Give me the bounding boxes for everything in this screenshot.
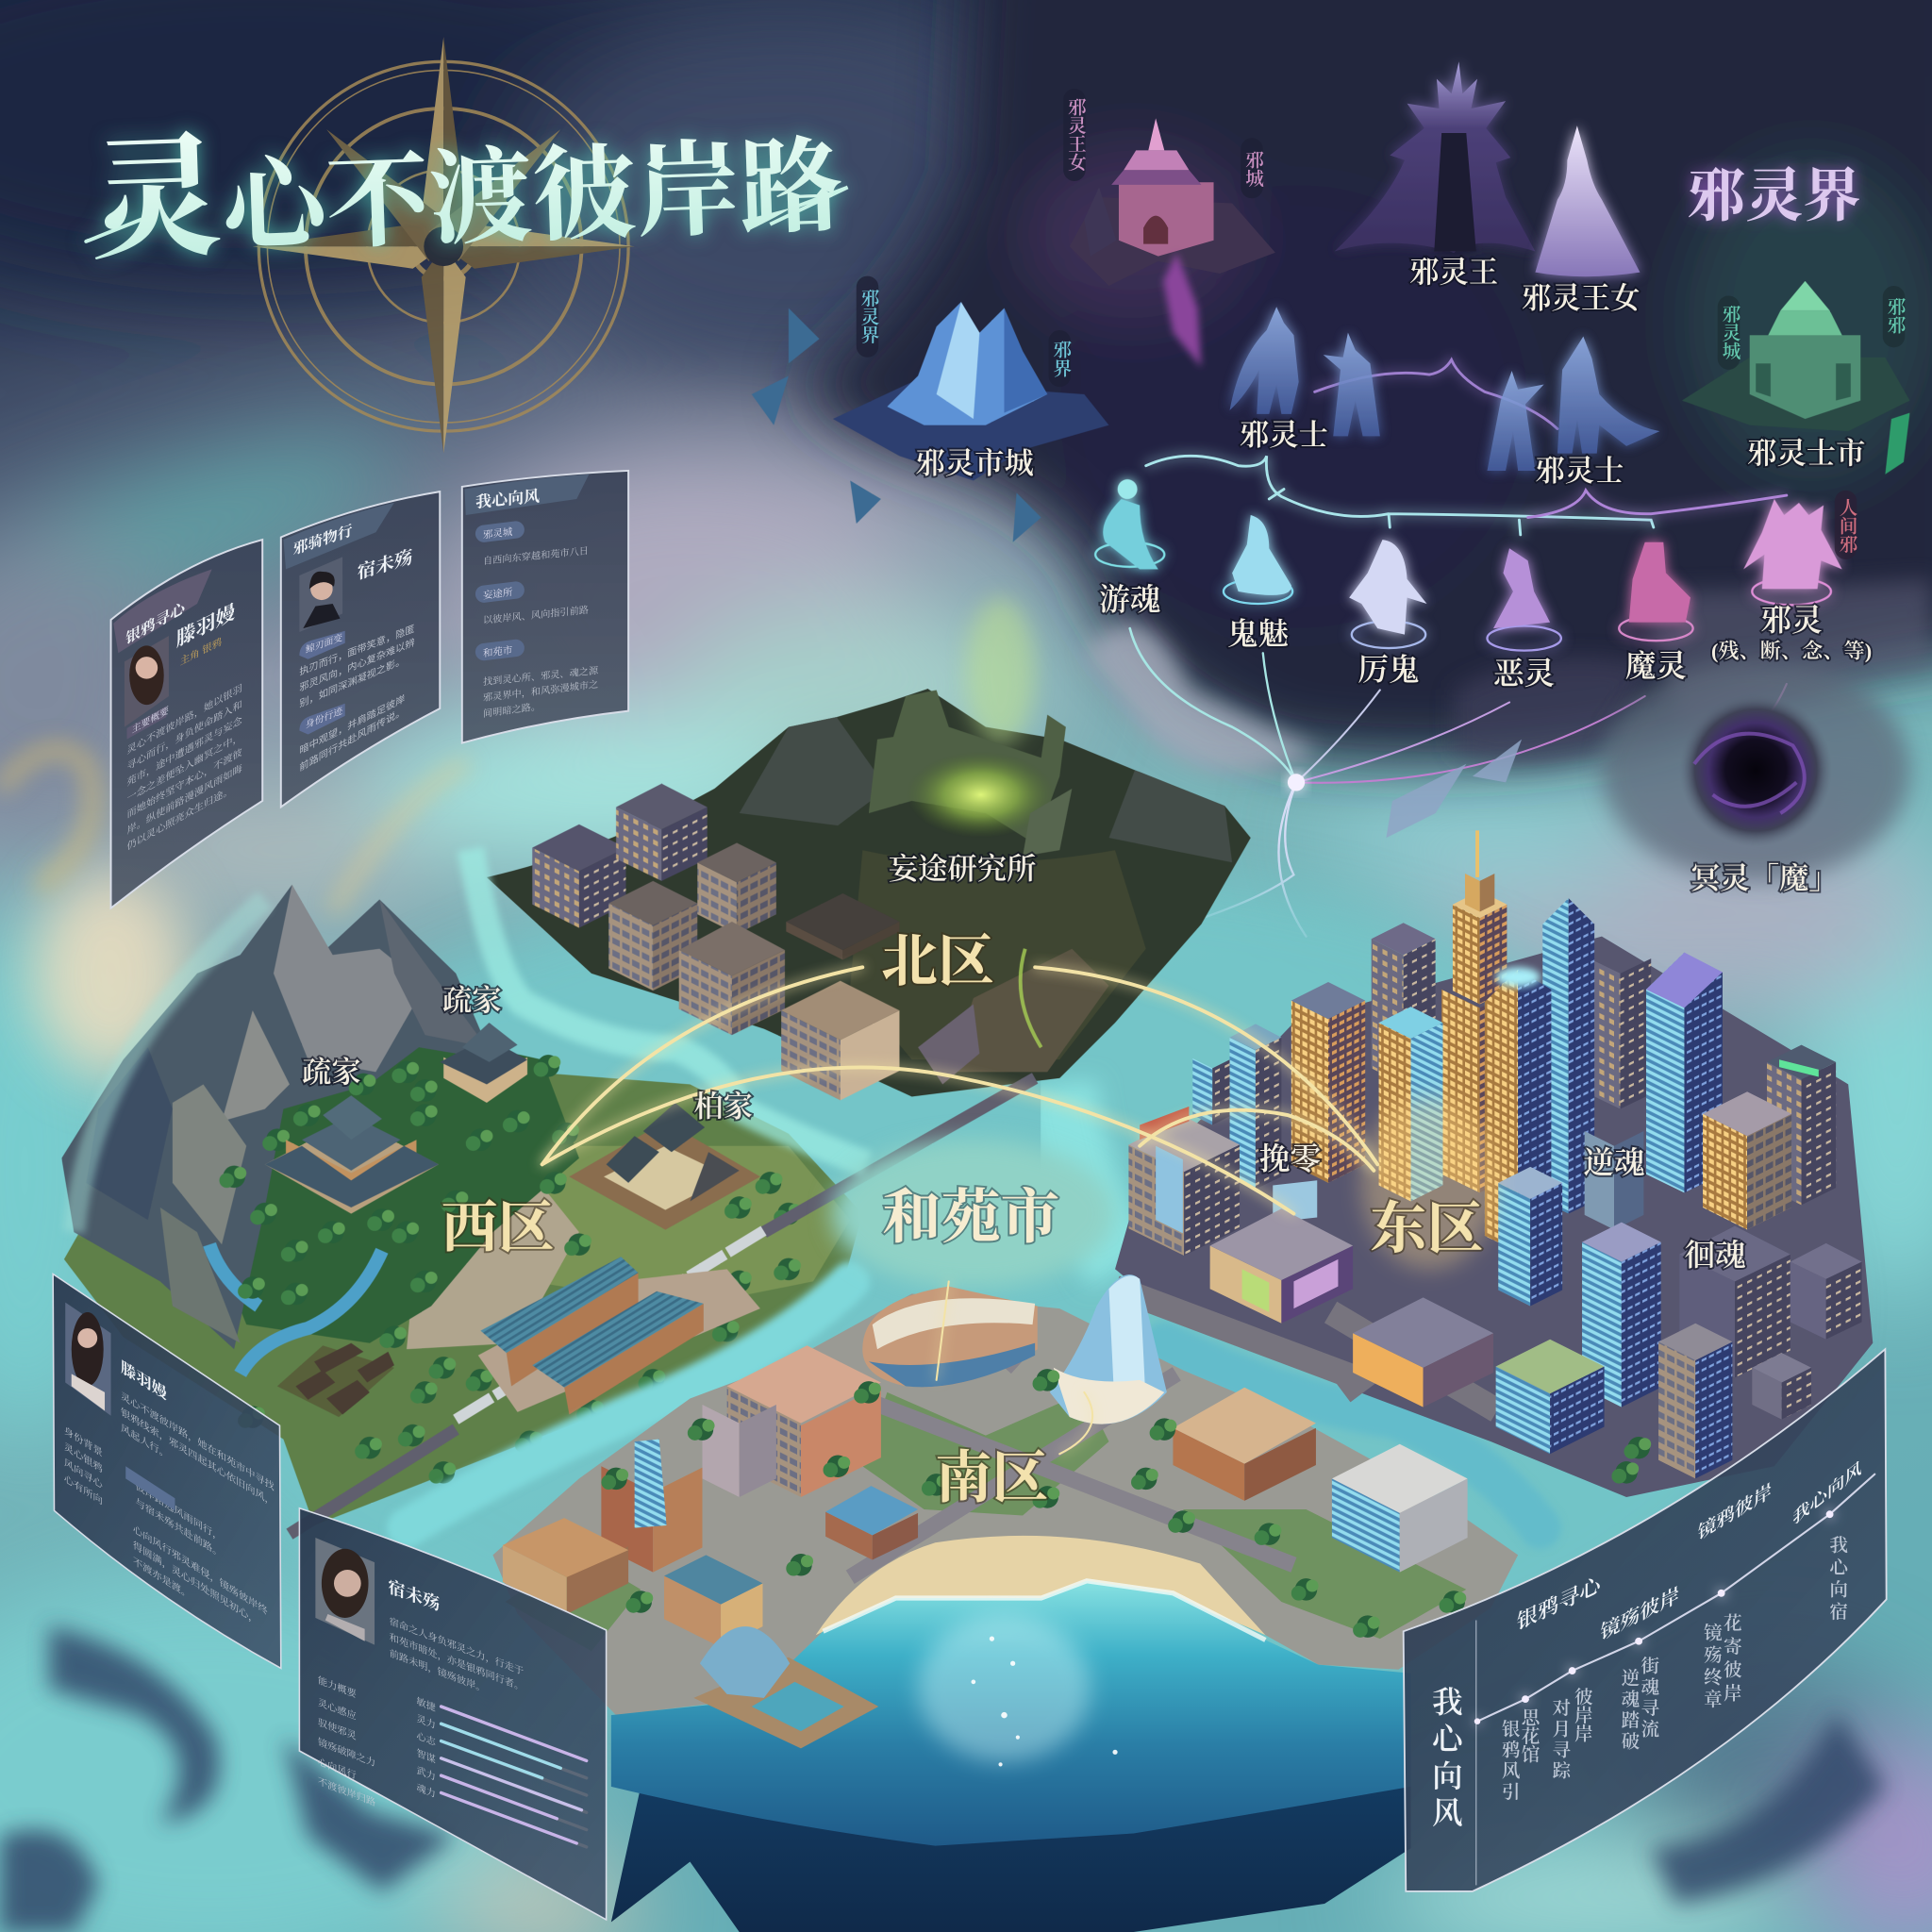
map: central plain behind city name: [832, 1140, 1115, 1288]
panel: dark spirit realm backdrop: [801, 0, 1932, 773]
vertical place tags: [857, 89, 1906, 559]
vertical event text: 镜殇终章: [1700, 1623, 1722, 1711]
district labels: [441, 930, 1484, 1509]
district labels: 北区: [881, 930, 994, 993]
body text: 找到灵心所、邪灵、魂之源: [483, 664, 599, 688]
panel: character card two: 执刃而行，面带笑意，隐匿: [299, 623, 415, 678]
body text: 身份背景: [64, 1424, 103, 1459]
icon: pink spirit castle: [1070, 118, 1275, 367]
body text: 智谋: [416, 1747, 436, 1766]
district labels: 西区: [441, 1196, 555, 1259]
vertical event text: 对月寻踪: [1549, 1698, 1571, 1782]
icon: brick hall: [1173, 1428, 1244, 1501]
east district skyline: [1128, 830, 1862, 1484]
place labels: 逆魂: [1583, 1145, 1645, 1180]
realm labels: 邪灵士市: [1747, 437, 1865, 470]
body text: 风向寻心: [64, 1456, 103, 1491]
body text: 灵力: [416, 1712, 436, 1731]
portrait: [299, 557, 342, 632]
card heading: [113, 569, 212, 653]
realm labels: (残、断、念、等): [1711, 639, 1872, 662]
icon: ruins: [869, 690, 1066, 844]
card heading: 银鸦寻心: [125, 597, 187, 648]
icon: observatory dome and pier: [693, 1657, 878, 1748]
vertical event text: 彼岸岸: [1571, 1687, 1592, 1742]
body text: 寻心而行，身负使命踏入和: [127, 697, 242, 773]
panel: character card lower left: [53, 1274, 281, 1668]
realm labels: 邪灵王女: [1522, 282, 1640, 315]
body text: 灵心不渡彼岸路，她在和苑市中寻找: [121, 1389, 275, 1493]
vertical event text: 逆魂踏破: [1618, 1668, 1640, 1752]
panel: character card two: 暗中观望，并肩踏足彼岸: [299, 691, 406, 757]
body text: 心向风行邪灵难侵，镜殇彼岸终: [133, 1522, 268, 1618]
stat bars: [441, 1707, 587, 1847]
body text: 灵心感应: [318, 1696, 357, 1723]
card heading: [283, 503, 394, 569]
pill label: 身份行迹: [306, 704, 343, 731]
name: 宿未殇: [358, 545, 413, 584]
place labels: 疏家: [302, 1056, 361, 1089]
timeline section titles: 我心向风: [1792, 1457, 1862, 1529]
place labels: [302, 852, 1839, 1273]
body text: 间明暗之路。: [483, 700, 541, 720]
panel: character card one: 主角 银鸦: [180, 635, 222, 668]
place labels: 疏家: [442, 984, 502, 1017]
forest underlay: [209, 1035, 579, 1343]
body text: 邪灵界中，和风弥漫城市之: [483, 678, 598, 704]
body text: 彼岸路远风雨同行，: [136, 1479, 222, 1544]
vertical place tags: 人间邪: [1836, 498, 1857, 553]
body text: 以彼岸风、风向指引前路: [483, 604, 589, 626]
panel: character card three: 邪灵城: [483, 525, 513, 541]
body text: 镜殇破障之力: [318, 1736, 375, 1770]
ghost: evil spirit: [1487, 548, 1561, 651]
vertical event text: 思花馆: [1518, 1707, 1540, 1763]
body text: 前路未明，镜殇彼岸。: [390, 1647, 485, 1695]
card heading: 我心向风: [475, 487, 540, 511]
panel: character card two: 邪灵风向，内心复杂难以辨: [299, 636, 415, 694]
body text: 驭使邪灵: [318, 1716, 357, 1742]
body text: 武力: [416, 1764, 436, 1783]
body text: 得圆满，灵心归处照见初心，: [133, 1538, 258, 1627]
pill labels: [475, 520, 525, 661]
panel: character card one: [111, 540, 262, 908]
body text: 宿命之人身负邪灵之力，行走于: [390, 1615, 525, 1678]
name: 宿未殇: [388, 1575, 440, 1615]
body text: 和苑市暗处，亦是银鸦同行者。: [390, 1631, 524, 1693]
icon: glass spiral tower: [1050, 1274, 1167, 1424]
realm labels: 邪灵士: [1535, 454, 1624, 487]
ghost: demon spirit: [1619, 542, 1693, 641]
body text: 仍以灵心照亮众生归途。: [127, 782, 233, 853]
body text: 敏捷: [416, 1695, 436, 1714]
map: west district land: [61, 885, 1035, 1534]
map: surrounding water and mist: [148, 862, 1824, 1750]
ghost: malevolent spirit: [1743, 499, 1842, 605]
district labels: 东区: [1370, 1197, 1484, 1260]
timeline section titles: 镜殇彼岸: [1601, 1583, 1679, 1644]
body text: 与宿未殇共赴前路。: [136, 1495, 222, 1560]
body text: 一念之差便坠入幽冥之中，: [127, 729, 242, 805]
realm labels: 恶灵: [1493, 657, 1555, 691]
icon: west shops: [503, 1545, 567, 1614]
body text: 灵心不渡彼岸路，她以银羽: [127, 681, 242, 757]
body text: 魂力: [416, 1781, 436, 1800]
body text: 苑市，途中遭遇邪灵与妄念: [127, 713, 242, 789]
card heading: 邪骑物行: [293, 521, 353, 558]
panel: character card two: 别，如同深渊凝视之影。: [299, 654, 405, 710]
body text: 心志: [416, 1729, 436, 1749]
map: mist between districts: [74, 849, 868, 1232]
icon: pink civic block: [727, 1386, 801, 1497]
figures: six ghost types: [1095, 479, 1842, 651]
body text: 而她始终坚守本心，不渡彼: [127, 745, 242, 821]
icon: green spirit castle: [1682, 281, 1909, 475]
card heading: [464, 475, 589, 515]
body text: 不渡亦是渡。: [133, 1554, 191, 1602]
icon: black hole vortex: [1386, 659, 1909, 881]
realm title: 邪灵界: [1688, 165, 1861, 229]
vertical place tags: 邪灵城: [1719, 305, 1740, 360]
icon: station: [478, 1257, 760, 1414]
icon: compass rose: [253, 37, 635, 454]
realm labels: [915, 256, 1872, 691]
map: north district hill: [487, 597, 1251, 1096]
pill label: [125, 1466, 175, 1510]
vertical place tags: 邪邪: [1884, 297, 1906, 334]
vertical title: 我心向风: [1427, 1686, 1462, 1834]
timeline section titles: 银鸦寻心: [1517, 1571, 1603, 1636]
body text: 风起人行。: [121, 1421, 169, 1462]
realm labels: 邪灵王: [1409, 256, 1498, 289]
place labels: 柏家: [693, 1090, 753, 1123]
panel: character card three: 和苑市: [483, 643, 513, 659]
vertical event text: [1498, 1535, 1847, 1803]
name: 滕羽嫚: [176, 600, 235, 651]
vertical event text: 花寄彼岸: [1720, 1613, 1741, 1707]
realm labels: 魔灵: [1625, 649, 1687, 684]
map: south district land: [492, 1274, 1518, 1715]
icon: blue crystal floating city: [752, 302, 1109, 542]
body text: 能力概要: [318, 1674, 357, 1701]
place labels: 挽零: [1259, 1142, 1321, 1177]
icon: small compound: [277, 1343, 394, 1417]
icon: white hospital block: [1332, 1478, 1400, 1573]
vertical place tags: 邪灵界: [858, 289, 879, 343]
district labels: 和苑市: [882, 1184, 1059, 1250]
body text: 银鸦线索，邪灵四起其心依旧向风，: [121, 1405, 275, 1509]
river: [209, 1244, 382, 1374]
vertical place tags: 邪灵王女: [1064, 97, 1086, 172]
name: 滕羽嫚: [121, 1357, 167, 1404]
icon: curved mall: [862, 1287, 1038, 1387]
pill label: 鲸刃面变: [306, 631, 342, 656]
hierarchy connector lines: [1096, 359, 1787, 949]
body text: 不渡彼岸归路: [318, 1775, 375, 1809]
portrait: [315, 1538, 375, 1645]
icon: courtyard compound: [569, 1103, 760, 1230]
timeline line: [1474, 1474, 1875, 1724]
body text: 心有所向: [64, 1472, 103, 1507]
realm labels: 邪灵市城: [915, 447, 1034, 480]
realm labels: 厉鬼: [1357, 653, 1420, 688]
body text: 心向风行: [318, 1756, 357, 1782]
realm labels: 游魂: [1099, 583, 1160, 618]
realm labels: 邪灵士: [1240, 419, 1328, 452]
portrait: [65, 1303, 111, 1416]
vertical event text: 我心向宿: [1826, 1535, 1847, 1624]
realm labels: 鬼魅: [1227, 617, 1289, 652]
body text: 自西向东穿越和苑市八日: [483, 544, 589, 567]
icon: temple large: [265, 1095, 439, 1214]
panel: character card two: [281, 491, 440, 808]
body text: [318, 1615, 525, 1809]
ghost: phantom: [1224, 515, 1292, 604]
timeline section titles: [1517, 1457, 1862, 1644]
ghost: fierce ghost: [1349, 540, 1426, 648]
icon: small shops: [664, 1576, 721, 1647]
panel: timeline lower right: [1404, 1349, 1887, 1891]
pill label: [299, 704, 345, 734]
north buildings: [532, 784, 979, 1100]
body text: 岸。纵使前路漫漫风雨如晦: [127, 761, 242, 837]
map: river bands: [407, 1281, 1541, 1528]
portrait: [125, 636, 169, 727]
body text: [64, 1389, 275, 1627]
icon: temple small: [440, 1023, 527, 1103]
place labels: 徊魂: [1684, 1238, 1746, 1273]
panel: character card lower middle: [299, 1508, 607, 1920]
body text: [127, 681, 242, 853]
body text: 灵心银鸦: [64, 1440, 103, 1475]
panel: character card two: 前路同行共赴风雨传说。: [299, 704, 405, 774]
realm labels: 邪灵: [1760, 604, 1823, 639]
map: east district base: [1115, 937, 1873, 1497]
vertical event text: 街魂寻流: [1638, 1656, 1659, 1740]
figures: spirit soldiers: [1230, 307, 1659, 471]
vertical place tags: 邪界: [1050, 340, 1072, 377]
mountains: [61, 885, 492, 1349]
vertical place tags: 邪城: [1242, 150, 1263, 188]
panel: character card three: [462, 471, 628, 743]
place labels: 妄途研究所: [889, 852, 1036, 885]
body text: [483, 544, 599, 720]
map: ocean bay: [611, 1581, 1411, 1932]
figure: spirit king: [1335, 61, 1535, 253]
vertical event text: 银鸦风引: [1498, 1719, 1520, 1803]
icon: south tower: [601, 1466, 653, 1573]
title: 灵心不渡彼岸路: [87, 102, 845, 276]
icon: blue-roof hall: [825, 1512, 873, 1560]
pill label: 主要概要: [132, 704, 169, 736]
forest: [219, 1055, 801, 1484]
railway line: [290, 1078, 1035, 1534]
district labels: 南区: [935, 1446, 1049, 1509]
panel: character card three: 妄途所: [483, 586, 513, 602]
ghost: wandering soul: [1095, 479, 1164, 569]
pill label: [299, 631, 345, 659]
place labels: 冥灵「魔」: [1690, 862, 1839, 895]
figure: spirit princess: [1535, 125, 1640, 276]
timeline section titles: 镜鸦彼岸: [1698, 1479, 1772, 1544]
routes: gold arcs linking districts: [542, 967, 1377, 1454]
map: east district roads: [1115, 1288, 1497, 1411]
